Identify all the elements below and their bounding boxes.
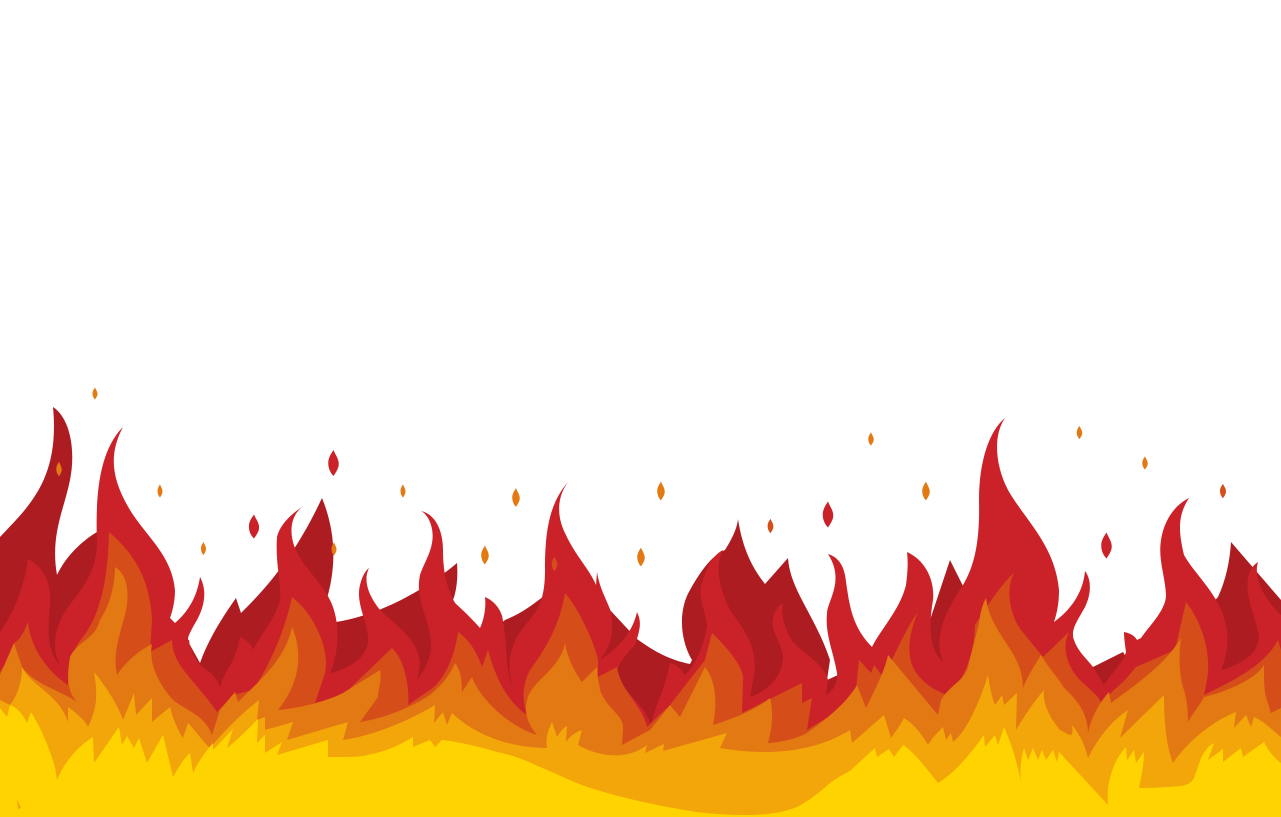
flame layer: dark red back flames [0, 407, 1281, 817]
ember [552, 557, 557, 571]
ember: red [249, 514, 259, 538]
ember [768, 519, 773, 533]
ember [1142, 456, 1148, 470]
flame layer: amber flames [0, 667, 1281, 817]
flame layer: red flames [0, 418, 1281, 817]
ember [56, 462, 62, 476]
flame layer: orange flames [0, 567, 1281, 817]
ember: red [328, 450, 339, 476]
ember [332, 542, 336, 556]
embers: floating sparks [56, 388, 1226, 571]
ember [922, 482, 930, 500]
ember: red [1101, 533, 1112, 558]
ember [92, 388, 98, 400]
flame layer: yellow base [0, 705, 1281, 817]
ember [637, 548, 645, 566]
ember [1220, 484, 1226, 498]
small amber spark on yellow base [17, 799, 21, 809]
ember [868, 432, 874, 446]
ember [1077, 426, 1082, 439]
ember [657, 482, 665, 500]
ember [512, 488, 520, 507]
ember [201, 542, 206, 555]
ember [158, 484, 162, 498]
ember: red [823, 502, 833, 527]
flame layer: dark orange flames [0, 532, 1281, 817]
ember [481, 546, 489, 564]
ember [400, 484, 406, 498]
